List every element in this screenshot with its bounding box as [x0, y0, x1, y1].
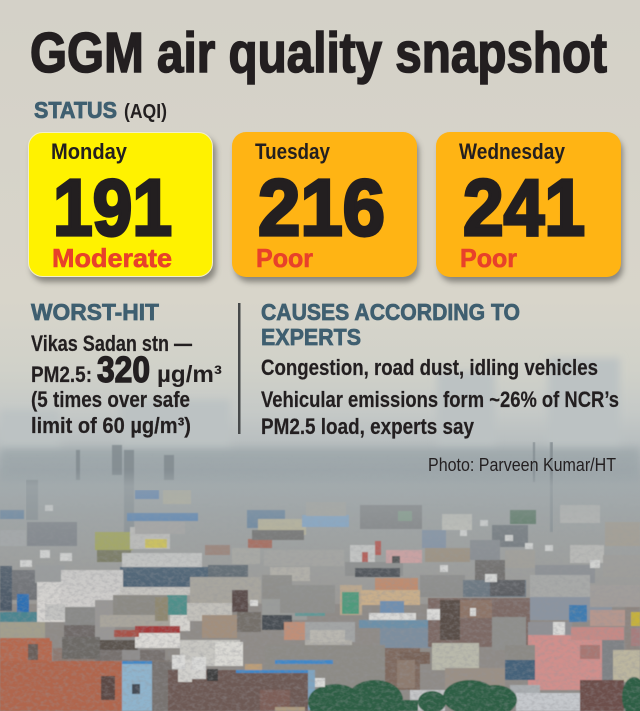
- status heading: [34, 97, 167, 123]
- panel: Monday AQI card: Monday: [51, 139, 128, 164]
- panel: worst-hit: PM2.5:: [31, 362, 92, 387]
- panel: causes according to experts: EXPERTS: [261, 324, 361, 350]
- panel: worst-hit: WORST-HIT: [31, 299, 159, 325]
- panel: worst-hit: 320: [97, 349, 150, 390]
- panel: worst-hit: Vikas Sadan stn —: [31, 331, 192, 356]
- panel: Monday AQI card: Moderate: [52, 243, 172, 273]
- panel: Tuesday AQI card: 216: [258, 163, 385, 252]
- panel: causes according to experts: CAUSES ACCORDING TO: [261, 299, 520, 325]
- panel: Wednesday AQI card: Poor: [460, 243, 517, 273]
- panel: Monday AQI card: [28, 132, 216, 282]
- status heading: (AQI): [124, 101, 167, 123]
- status heading: STATUS: [34, 97, 117, 123]
- panel: causes according to experts: PM2.5 load, experts say: [261, 414, 475, 439]
- panel: Tuesday AQI card: Tuesday: [255, 139, 331, 164]
- photo credit: Photo: Parveen Kumar/HT: [428, 455, 616, 475]
- panel: worst-hit: limit of 60 µg/m³): [31, 413, 191, 438]
- panel: Wednesday AQI card: [436, 132, 623, 282]
- panel: Tuesday AQI card: Poor: [256, 243, 313, 273]
- panel: causes according to experts: [261, 299, 619, 439]
- panel: Wednesday AQI card: Wednesday: [459, 139, 566, 164]
- panel: worst-hit: (5 times over safe: [31, 387, 190, 412]
- panel: worst-hit: µg/m³: [157, 361, 222, 387]
- photo: hazy city skyline: [0, 358, 640, 711]
- panel: worst-hit: [31, 299, 222, 438]
- panel: Tuesday AQI card: [232, 132, 419, 282]
- panel: Monday AQI card: 191: [53, 163, 172, 252]
- panel: Wednesday AQI card: 241: [463, 163, 585, 252]
